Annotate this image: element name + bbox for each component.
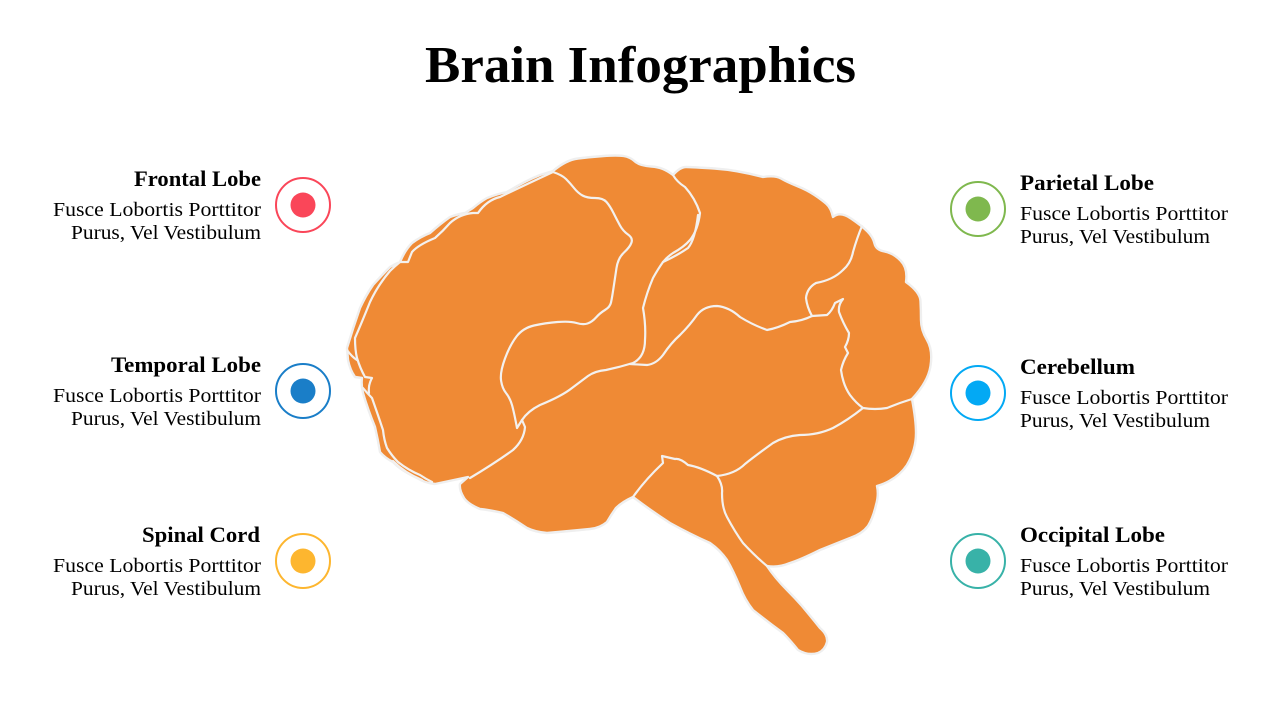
description: cerebellum: Fusce Lobortis Porttitor [1020, 387, 1228, 409]
item: cerebellum [951, 354, 1228, 432]
description: temporal lobe: Fusce Lobortis Porttitor [53, 385, 261, 407]
item: temporal lobe [53, 352, 330, 430]
description: occipital lobe: Purus, Vel Vestibulum [1020, 578, 1210, 600]
description: parietal lobe [1020, 203, 1228, 248]
title: Brain Infographics [425, 37, 856, 94]
item: occipital lobe [951, 522, 1228, 600]
icon: frontal lobe marker [276, 178, 330, 232]
central sulcus [630, 299, 912, 409]
brain illustration [347, 156, 931, 654]
description: spinal cord: Fusce Lobortis Porttitor [53, 555, 261, 577]
description: occipital lobe [1020, 555, 1228, 600]
item: parietal lobe [951, 170, 1228, 248]
item: spinal cord [53, 522, 330, 600]
frontal lobe boundary [470, 172, 632, 478]
description: cerebellum: Purus, Vel Vestibulum [1020, 410, 1210, 432]
heading: spinal cord: Spinal Cord [142, 522, 260, 547]
description: occipital lobe: Fusce Lobortis Porttitor [1020, 555, 1228, 577]
heading: parietal lobe: Parietal Lobe [1020, 170, 1154, 195]
heading: frontal lobe: Frontal Lobe [134, 166, 261, 191]
description: frontal lobe: Fusce Lobortis Porttitor [53, 199, 261, 221]
description: parietal lobe: Fusce Lobortis Porttitor [1020, 203, 1228, 225]
spinal cord boundary [717, 476, 767, 566]
parietal fold accent [663, 215, 698, 262]
description: parietal lobe: Purus, Vel Vestibulum [1020, 226, 1210, 248]
heading: occipital lobe: Occipital Lobe [1020, 522, 1165, 547]
temporal lobe boundary [522, 175, 700, 420]
item: frontal lobe [53, 166, 330, 244]
icon: parietal lobe marker [951, 182, 1005, 236]
icon: temporal lobe marker [276, 364, 330, 418]
heading: cerebellum: Cerebellum [1020, 354, 1135, 379]
heading: temporal lobe: Temporal Lobe [111, 352, 261, 377]
icon: spinal cord marker [276, 534, 330, 588]
description: frontal lobe: Purus, Vel Vestibulum [71, 222, 261, 244]
description: temporal lobe [53, 385, 261, 430]
description: cerebellum [1020, 387, 1228, 432]
cerebellum boundary [633, 408, 863, 497]
occipital sulcus [806, 226, 862, 316]
description: spinal cord: Purus, Vel Vestibulum [71, 578, 261, 600]
brain silhouette [347, 156, 931, 654]
lower front fold [347, 350, 422, 480]
icon: cerebellum marker [951, 366, 1005, 420]
description: temporal lobe: Purus, Vel Vestibulum [71, 408, 261, 430]
outer cortex fold [355, 172, 553, 482]
description: spinal cord [53, 555, 261, 600]
description: frontal lobe [53, 199, 261, 244]
icon: occipital lobe marker [951, 534, 1005, 588]
